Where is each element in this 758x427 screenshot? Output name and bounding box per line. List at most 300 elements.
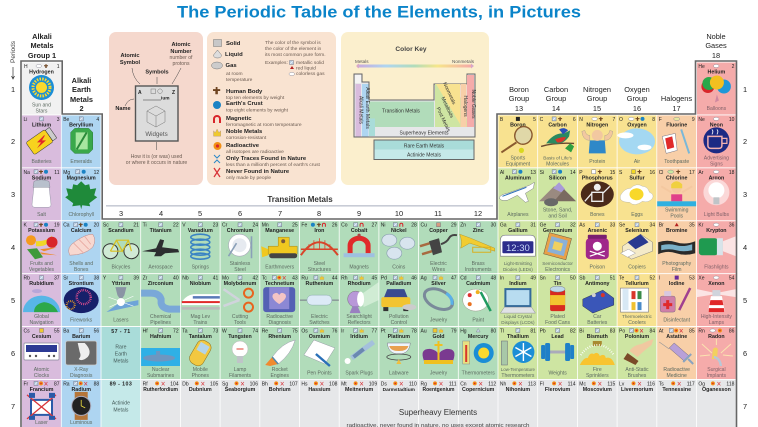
element: Carbon: Carbon	[548, 122, 567, 128]
element: Rubidium	[22, 274, 61, 326]
legend: human body: top ten elements by weight	[226, 95, 285, 101]
group numbers 3 to 12: 3	[119, 209, 123, 218]
element: Radium: 88	[94, 381, 99, 387]
element: Krypton: 36	[729, 223, 735, 229]
element: Silicon: Stone, Sand,	[543, 207, 572, 213]
element: Barium: Diagnosis	[70, 373, 93, 379]
periods axis label: Periods	[10, 40, 17, 63]
element: Darmstadtium: Ds	[381, 381, 387, 387]
icon: cutters	[224, 289, 253, 312]
period numbers left: 3	[11, 190, 15, 199]
element: Nitrogen: Protein	[589, 159, 606, 165]
callout labels: Number	[170, 49, 192, 55]
widget sample cell: ium	[161, 96, 170, 102]
element: Cobalt: Co	[341, 223, 348, 229]
legend: noble metals: Noble Metals	[226, 129, 263, 135]
element: Lead: Weights	[548, 370, 567, 376]
panel: symbol legend	[207, 32, 336, 185]
element: Boron	[498, 115, 537, 167]
element: Selenium: Selenium	[625, 228, 649, 234]
element: Scandium: 21	[133, 223, 139, 229]
element: Vanadium: V	[182, 223, 186, 229]
rare earth and actinide key: Rare Earth Metals	[404, 144, 445, 150]
icon: glowing bulb	[703, 179, 729, 205]
group label: boron: Group	[509, 94, 529, 103]
element: Dubnium: Db	[182, 381, 189, 387]
element: Titanium: Ti	[143, 223, 147, 229]
period numbers right: 2	[743, 137, 747, 146]
group label: halogens: Halogens	[661, 94, 692, 103]
legend: symbol colour note: red liquid	[296, 66, 316, 72]
icon: tennis racket	[501, 123, 536, 153]
icon: thermometer and sun	[463, 341, 494, 364]
element: Francium: 87	[54, 381, 60, 387]
element: Iron	[300, 221, 339, 273]
icon: emerald	[71, 128, 93, 153]
legend: states of matter: Solid	[226, 41, 241, 47]
icon: digital clock: 12:30	[506, 243, 530, 254]
element: Titanium: Titanium	[150, 228, 172, 234]
element: Astatine: Radioactive	[663, 367, 690, 373]
element: Polonium	[618, 327, 656, 379]
icon: shell	[69, 234, 95, 255]
mini periodic table: Metalloids	[439, 96, 455, 119]
element: Zirconium: Chemical	[150, 314, 171, 320]
element: Hydrogen: 1	[57, 64, 60, 70]
icon: laser	[106, 287, 138, 312]
element: Darmstadtium: Darmstadtium	[383, 387, 415, 393]
element: Calcium: Ca	[63, 223, 70, 229]
icon: chip	[544, 233, 572, 260]
legend: only traces: less than a millionth percent of earth's crust	[226, 162, 321, 168]
element: Francium: Fr	[24, 381, 29, 387]
icon: salt shaker	[32, 180, 51, 207]
element: Tungsten: Filaments	[229, 373, 251, 379]
element: Scandium: Sc	[103, 223, 109, 229]
element: Yttrium	[101, 274, 140, 326]
element: Xenon: High-Intensity	[701, 314, 732, 320]
icon: flashlight	[699, 236, 736, 256]
element: Copernicium: 112	[488, 381, 496, 387]
legend: states of matter	[212, 40, 253, 83]
element: Nihonium	[498, 380, 537, 427]
callout labels: How it is (or was) used	[131, 154, 182, 160]
element: Technetium	[260, 274, 299, 326]
element: Boron: 5	[533, 117, 536, 123]
element: Neon: Neon	[710, 122, 723, 128]
callout labels: Atomic	[172, 42, 190, 48]
element: Potassium: Fruits and	[30, 261, 53, 267]
element: Zirconium: Pipelines	[150, 320, 171, 326]
element: Nihonium: Nh	[500, 381, 507, 387]
element: Ruthenium: Ru	[301, 276, 308, 282]
legend: radioactive: Radioactive	[226, 143, 260, 149]
element: Calcium: Calcium	[71, 228, 92, 234]
icon: film strip	[658, 241, 695, 255]
element: Manganese: Manganese	[265, 228, 294, 234]
element: Copernicium	[459, 380, 498, 427]
element: Astatine	[657, 327, 696, 379]
element: Manganese: 25	[292, 223, 298, 229]
element: Krypton: Flashlights	[704, 265, 729, 271]
element: Copper	[419, 221, 458, 273]
widget sample cell	[136, 86, 178, 141]
element: Mercury	[459, 327, 498, 379]
callout labels: Atomic	[121, 53, 139, 59]
element: Indium: Indium	[509, 281, 527, 287]
element: Nitrogen: 7	[613, 117, 616, 123]
legend: noble metals: corrosion-resistant	[226, 135, 267, 141]
element: Oganesson: 118	[726, 381, 735, 387]
element: Livermorium: Lv	[619, 381, 625, 387]
element: Helium	[697, 62, 736, 114]
callout labels	[115, 42, 193, 166]
element: Nihonium: Nihonium	[506, 387, 530, 393]
icon: switch capsule	[300, 295, 339, 305]
callout labels: number of	[170, 55, 193, 61]
element: Tantalum: 73	[213, 328, 219, 334]
element: Iodine: Iodine	[669, 281, 685, 287]
icon: fruits and vegetables	[26, 235, 58, 259]
element: Livermorium: 116	[647, 381, 655, 387]
element: Magnesium	[62, 168, 101, 220]
element: Mercury: Thermometers	[462, 370, 495, 376]
element: Sulfur: Eggs	[631, 212, 643, 218]
element: Silver: 47	[451, 276, 457, 282]
group numbers 3 to 12: 8	[317, 209, 321, 218]
element: Selenium: Se	[619, 223, 625, 229]
element: Tennessine: Tennessine	[662, 387, 691, 393]
group label: alkali metals: Alkali	[32, 32, 52, 41]
mini periodic table: Transition Metals	[382, 108, 420, 114]
element: Copernicium: Copernicium	[462, 387, 495, 393]
element: Silver: Jewelry	[430, 318, 448, 324]
element: Xenon: 54	[729, 276, 735, 282]
element: Helium: 2	[732, 64, 735, 70]
element: Platinum: 78	[411, 328, 417, 334]
legend: states of matter: at room	[226, 71, 243, 77]
element: Cesium: 55	[54, 328, 60, 334]
icon: searchlight	[348, 282, 379, 313]
element: Polonium: Brushes	[628, 373, 647, 379]
element: Flerovium: Fl	[540, 381, 544, 387]
legend: never found: Never Found in Nature	[226, 169, 290, 175]
group numbers 3 to 12: 10	[395, 209, 403, 218]
element: Platinum: Labware	[389, 370, 409, 376]
element: Tennessine: 117	[687, 381, 695, 387]
icon: paper and pen	[304, 340, 335, 366]
element: Rhodium: Rh	[341, 276, 348, 282]
element: Antimony: Batteries	[587, 320, 608, 326]
element: Copper: Wires	[432, 267, 445, 273]
element: Calcium: Bones	[74, 267, 89, 273]
element: Silicon: and Soil	[548, 213, 567, 219]
element: Moscovium	[578, 380, 617, 427]
group label: nitrogen: Nitrogen	[583, 85, 611, 94]
element: Chromium	[220, 221, 259, 273]
icon: neon coffee sign	[703, 127, 729, 153]
element: Actinide Metals placeholder: Actinide	[112, 400, 130, 406]
element: Xenon: Xenon	[708, 281, 724, 287]
element: Copper: Cu	[420, 223, 427, 229]
element: Calcium: Shells and	[69, 261, 93, 267]
element: Oxygen: Oxygen	[627, 122, 647, 128]
element: Xenon: Xe	[698, 276, 705, 282]
element: Nitrogen	[578, 115, 617, 167]
element: Bismuth: Bismuth	[587, 334, 608, 340]
element: Strontium: Fireworks	[70, 318, 93, 324]
icon: jet	[142, 239, 179, 256]
element: Phosphorus: Bones	[590, 212, 605, 218]
element: Nitrogen: N	[579, 117, 583, 123]
group label: carbon: 14	[552, 104, 560, 113]
element: Niobium: Trains	[193, 320, 208, 326]
legend: states of matter: temperature	[226, 77, 253, 83]
group label: carbon: Group	[546, 94, 566, 103]
icon: sun	[29, 75, 54, 100]
element: Mercury: 80	[491, 328, 496, 334]
element: Strontium: Strontium	[69, 281, 94, 287]
icon: sky	[618, 128, 655, 154]
group label: boron	[509, 85, 529, 113]
icon: dumbbell	[541, 343, 574, 361]
element: Dubnium	[181, 380, 220, 427]
element: Palladium: Pd	[381, 276, 387, 282]
element: Chlorine: Pools	[670, 213, 684, 219]
icon: light bulb	[232, 341, 248, 363]
mini periodic table: Halogens	[462, 95, 468, 117]
element: Francium: Laser	[35, 420, 48, 426]
group label: noble gases: Noble	[706, 32, 726, 41]
element: Astatine: 85	[689, 328, 695, 334]
icon: leaf	[65, 181, 97, 209]
element: Chromium: Cr	[222, 223, 228, 229]
element: Krypton: Krypton	[706, 228, 727, 234]
element: Radon: Rn	[698, 328, 705, 334]
color key heading: Color Key	[395, 46, 427, 53]
element: Niobium: Nb	[182, 276, 189, 282]
element: Iron: Steel	[314, 261, 325, 267]
element: Roentgenium	[419, 380, 458, 427]
element: Cesium: Cs	[24, 328, 30, 334]
element: Sulfur	[618, 168, 656, 220]
element: Helium: Balloons	[707, 106, 727, 112]
element: Radon: Surgical	[707, 367, 726, 373]
element: Cesium: Cesium	[32, 334, 51, 340]
element: Hafnium: Nuclear	[152, 367, 170, 373]
element: Silver: Silver	[431, 281, 446, 287]
element: Manganese: Earthmovers	[265, 265, 295, 271]
mini periodic table: Alkali Metals	[358, 96, 364, 125]
element: Moscovium: Moscovium	[583, 387, 612, 393]
element: Phosphorus	[578, 168, 617, 220]
element: Oxygen	[618, 115, 656, 167]
element: Sulfur: Sulfur	[629, 175, 645, 181]
element: Antimony: 51	[610, 276, 616, 282]
element: Carbon	[538, 115, 577, 167]
group label: oxygen	[624, 85, 650, 113]
icon: airplane	[499, 182, 534, 202]
element: Tin: 50	[570, 276, 576, 282]
element: Zinc	[459, 221, 498, 273]
element: Nickel: 28	[411, 223, 417, 229]
element: Arsenic: Poison	[590, 265, 605, 271]
element: Zinc: 30	[491, 223, 496, 229]
element: Oganesson	[697, 380, 736, 427]
element: Lead: Lead	[551, 334, 564, 340]
icon: plug	[420, 235, 457, 255]
element: Sodium: Salt	[37, 212, 46, 218]
element: Sodium: 11	[54, 170, 60, 176]
icon: rocks	[539, 182, 576, 206]
element: Rhenium: Re	[262, 328, 268, 334]
mini periodic table: Nonmetals	[441, 81, 457, 106]
icon: fried egg	[620, 185, 653, 205]
element: Polonium: 84	[649, 328, 655, 334]
element: Palladium	[379, 274, 418, 326]
element: Copper: 29	[451, 223, 457, 229]
element: Indium: Displays (LCDs)	[501, 320, 535, 325]
element: Rhenium	[260, 327, 299, 379]
legend: magnetic: ferromagnetic at room temperature	[226, 122, 302, 128]
icon: palette	[463, 289, 491, 311]
element: Zinc: Instruments	[465, 267, 492, 273]
callout labels: or where it occurs in nature	[126, 160, 187, 166]
element: Flerovium: 114	[568, 381, 576, 387]
element: Niobium: Niobium	[190, 281, 211, 287]
element: Molybdenum: Cutting	[232, 314, 248, 320]
element: Lead	[538, 327, 577, 379]
icon: brush	[624, 339, 654, 365]
element: Oxygen: 8	[652, 117, 655, 123]
element: Zinc: Zn	[460, 223, 466, 229]
element: Radium: Luminous	[70, 420, 93, 426]
element: Tin: Tin	[554, 281, 562, 287]
element: Iron: 26	[332, 223, 338, 229]
element: Astatine: At	[659, 328, 664, 334]
element: Ruthenium: Electric	[311, 314, 328, 320]
element: Hafnium	[141, 327, 180, 379]
element: Gallium: 31	[530, 223, 536, 229]
element: Silicon	[538, 168, 577, 220]
group label: alkali earth metals: Earth	[72, 85, 91, 94]
element: Zirconium	[141, 274, 180, 326]
element: Rhenium: Rocket	[272, 367, 288, 373]
element: Silicon: Si	[540, 170, 544, 176]
element: Sodium: Na	[24, 170, 30, 176]
element: Argon	[697, 168, 736, 220]
metals to nonmetals gradient arrow: Nonmetals	[452, 59, 475, 64]
element: Astatine: Medicine	[667, 373, 687, 379]
element: Barium: 56	[94, 328, 99, 334]
element: Tellurium: 52	[649, 276, 655, 282]
element: Magnesium: 12	[94, 170, 99, 176]
element: Actinide Metals placeholder: Metals	[113, 407, 129, 413]
element: Bismuth: Bi	[579, 328, 584, 334]
element: Niobium: Mag Lev	[191, 314, 211, 320]
element: Aluminum: Al	[500, 170, 504, 176]
element: Selenium	[618, 221, 656, 273]
element: Xenon: Lamps	[709, 320, 724, 326]
element: Osmium	[300, 327, 339, 379]
element: Cadmium: 48	[491, 276, 496, 282]
element: Gallium: Light-Emitting	[504, 261, 532, 266]
element: Tellurium: Coolers	[628, 320, 646, 326]
element: Titanium: Aerospace	[148, 265, 173, 271]
element: Molybdenum: Molybdenum	[224, 281, 257, 287]
superheavy elements note	[346, 408, 530, 427]
element: Gallium	[498, 221, 537, 273]
element: Technetium: Diagnosis	[269, 320, 291, 326]
group label: noble gases: Gases	[705, 41, 727, 50]
legend: earth's crust	[213, 101, 289, 114]
element: Silicon: Silicon	[549, 175, 566, 181]
element: Boron: Boron	[510, 122, 526, 128]
group label: alkali metals: Metals	[30, 41, 54, 50]
element: Nickel	[379, 221, 418, 273]
element: Indium: In	[500, 276, 504, 282]
element: Tin: Food Cans	[545, 320, 571, 326]
element: Tin: Sn	[540, 276, 546, 282]
element: Rubidium: Rb	[24, 276, 30, 282]
element: Helium: He	[698, 64, 705, 70]
element: Tellurium: Tellurium	[625, 281, 649, 287]
legend: symbol colour note: metallic solid	[296, 60, 324, 66]
element: Arsenic: 33	[610, 223, 616, 229]
group numbers 3 to 12: 4	[159, 209, 163, 218]
element: Carbon: C	[540, 117, 544, 123]
element: Zinc: Brass	[472, 261, 485, 267]
element: Bromine	[657, 221, 696, 273]
element: Radium: Ra	[63, 381, 70, 387]
element: Beryllium: Emeralds	[70, 159, 92, 165]
element: Boron: Sports	[511, 155, 526, 161]
group numbers 3 to 12: 12	[474, 209, 482, 218]
element: Seaborgium: 106	[250, 381, 258, 387]
element: Arsenic	[578, 221, 617, 273]
element: Magnesium: Magnesium	[67, 175, 96, 181]
element: Seaborgium: Seaborgium	[225, 387, 256, 393]
element: Tungsten: Tungsten	[228, 334, 252, 340]
group label: nitrogen: Group	[587, 94, 607, 103]
element: Tantalum	[181, 327, 220, 379]
element: Germanium: Semiconductor	[542, 261, 573, 266]
element: Chlorine: Swimming	[665, 207, 689, 213]
group numbers 3 to 12: 7	[278, 209, 282, 218]
group label: noble gases: 18	[712, 51, 720, 60]
period numbers left	[11, 85, 15, 411]
element: Hafnium: Hf	[143, 328, 148, 334]
icon: balloons	[701, 76, 731, 102]
element: Oxygen: O	[619, 117, 623, 123]
element: Vanadium: Vanadium	[188, 228, 213, 234]
element: Silver	[419, 274, 458, 326]
element: Yttrium: Y	[103, 276, 107, 282]
element: Tungsten: W	[222, 328, 227, 334]
period numbers left: 2	[11, 137, 15, 146]
element: Palladium: Control	[391, 320, 407, 326]
legend: magnetic	[213, 115, 302, 128]
element: Palladium: 46	[411, 276, 417, 282]
element: Rutherfordium: 104	[170, 381, 179, 387]
element: Iridium	[340, 327, 378, 379]
panel: color key	[341, 32, 489, 185]
element: Meitnerium: 109	[369, 381, 377, 387]
element: Argon: Ar	[698, 170, 704, 176]
metals to nonmetals gradient arrow: Metals	[355, 59, 369, 64]
element: Iridium: Ir	[341, 328, 344, 334]
element: Cobalt: Magnets	[349, 265, 369, 271]
